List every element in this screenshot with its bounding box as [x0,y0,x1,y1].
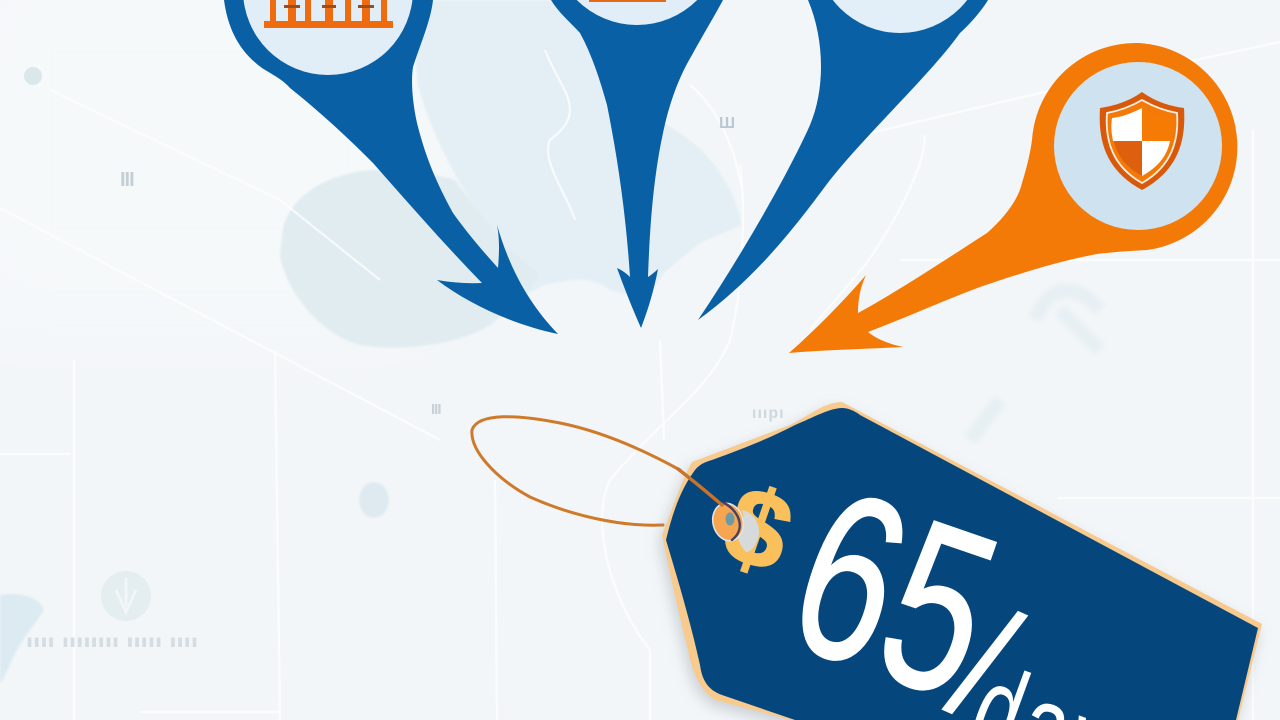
tag body [662,402,1262,720]
pin inner disc [243,0,413,75]
tag face [666,408,1258,720]
price tag [472,402,1262,720]
icon: orange columns [264,0,393,28]
tag string back loop [472,417,680,525]
icon: shield [1100,92,1184,190]
eastern faint park [970,291,1100,440]
faint map labels: III [120,169,134,191]
icon: orange base [589,0,666,2]
lake: small pond [359,482,389,518]
faint map labels: IIII IIIIIIII IIIII IIII [26,634,198,650]
lake: southwest shore [0,594,44,685]
dollar sign: $ [711,461,807,595]
tag string front [678,469,722,505]
faint map labels [24,67,785,650]
tag eyelet [678,469,759,552]
faint map labels: Ш [719,115,735,132]
pin inner disc [815,0,985,33]
pin: orange shield [789,43,1237,353]
lake: western water body [280,170,540,348]
lake: large northern water body [412,0,742,300]
pin: blue right [698,0,988,320]
pin inner disc [1054,62,1222,230]
eyelet dark edge [724,503,740,540]
faint map labels: ıııpı [752,405,785,422]
pin: blue left with columns icon [224,0,558,334]
faint map labels: III [431,401,441,418]
pin: blue centre [551,0,723,328]
pin inner disc [552,0,722,25]
